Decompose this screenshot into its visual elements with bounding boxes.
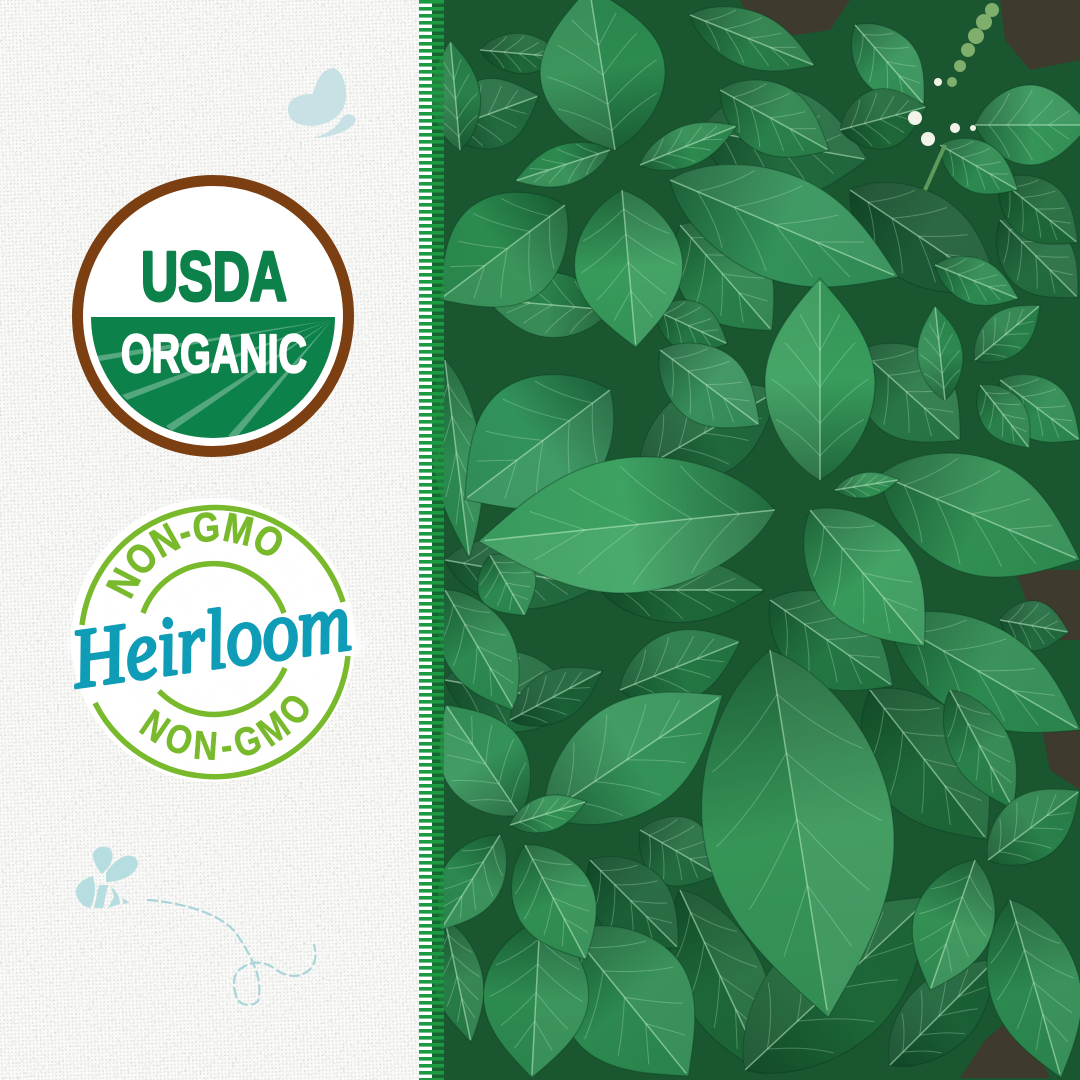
background leaves — [415, 0, 1080, 1080]
ORGANIC wordmark: ORGANIC — [121, 324, 307, 384]
badge: USDA Organic — [78, 180, 348, 452]
foreground leaves — [407, 0, 1080, 1080]
icon: bee with dashed flight path — [76, 847, 316, 1005]
script word: Heirloom — [65, 575, 356, 706]
fabric background — [0, 0, 432, 1080]
soil patches — [740, 0, 1080, 1078]
green field segment — [91, 317, 335, 438]
curved text: top: NON-GMO — [106, 512, 282, 599]
USDA wordmark: USDA — [141, 238, 287, 316]
icon: butterfly — [288, 68, 356, 138]
curved text: bottom: NON-GMO — [138, 696, 308, 760]
decorative striped ribbon edge — [419, 0, 444, 1080]
outer ring arcs — [82, 508, 348, 777]
badge: Non-GMO Heirloom — [65, 498, 362, 782]
field rays — [96, 320, 332, 438]
flower spike — [908, 3, 999, 190]
flight path — [148, 900, 316, 1005]
photo: basil plant — [407, 0, 1080, 1080]
filler foliage — [433, 63, 1080, 905]
